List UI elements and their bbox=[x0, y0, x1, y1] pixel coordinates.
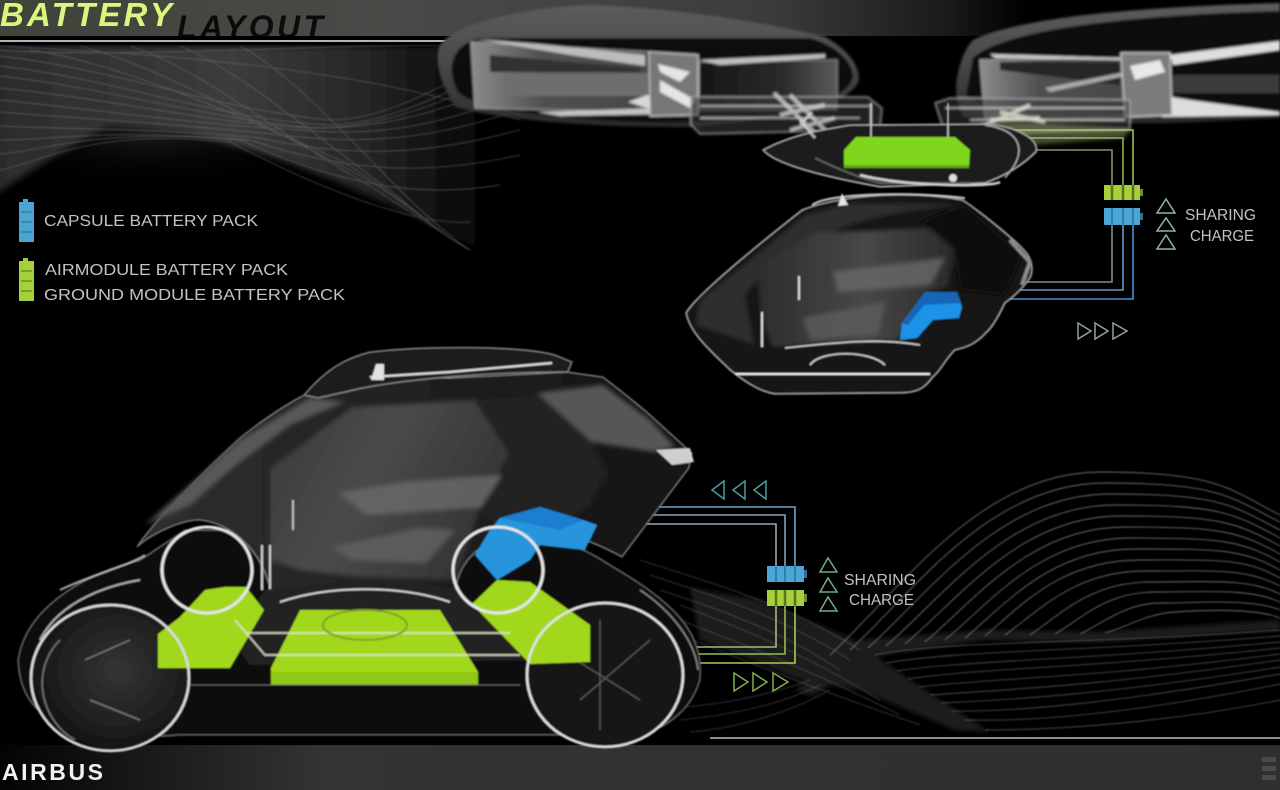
capsule upper-left panel bbox=[695, 203, 960, 345]
air module green battery bbox=[844, 137, 970, 168]
connector lines: car blue bbox=[600, 507, 795, 566]
rotor blades bbox=[475, 39, 825, 116]
ribbon haze bbox=[690, 588, 1280, 732]
capsule shell bbox=[686, 195, 1032, 394]
connector lines: capsule blue bbox=[955, 225, 1133, 299]
rotor hub bbox=[649, 52, 698, 116]
front wheel arch ring bbox=[453, 527, 543, 613]
icon: blue battery bbox=[19, 199, 34, 242]
capsule window bbox=[757, 228, 955, 347]
rotor duct outer bbox=[956, 3, 1280, 123]
car cabin shell bbox=[137, 372, 692, 590]
rotor hub bbox=[1121, 53, 1172, 117]
upper green battery bbox=[1104, 185, 1143, 200]
rear wheel bbox=[30, 604, 190, 752]
logo: airbus: AIRBUS bbox=[2, 759, 103, 785]
legend bbox=[19, 199, 345, 304]
car front light bbox=[656, 448, 694, 465]
crest lines bbox=[830, 472, 1280, 655]
lower lines bbox=[875, 630, 1280, 730]
battery indicator: lower sharing charge bbox=[767, 566, 807, 606]
connector lines: air module green bbox=[970, 130, 1133, 185]
icon: green battery bbox=[19, 258, 34, 301]
title: LAYOUT bbox=[177, 9, 325, 45]
rotor inner box right bbox=[699, 60, 837, 110]
rotor left bbox=[437, 5, 882, 137]
battery indicator: upper sharing charge bbox=[1104, 185, 1143, 225]
label: sharing charge: CHARGE bbox=[1190, 228, 1254, 245]
capsule interior panels bbox=[695, 203, 1022, 347]
legend: capsule battery pack bbox=[19, 199, 258, 242]
car roof canopy bbox=[304, 347, 572, 398]
capsule seat base bbox=[785, 341, 920, 365]
label: sharing charge: CHARGE bbox=[849, 592, 914, 609]
header band bbox=[0, 0, 1280, 45]
green battery: rear bbox=[158, 587, 264, 668]
rotor blades bbox=[990, 41, 1280, 117]
capsule blue battery bbox=[900, 292, 962, 340]
label: sharing charge: SHARING bbox=[844, 572, 916, 589]
upward triangles bbox=[1157, 199, 1175, 249]
rear wheel arch ring bbox=[162, 527, 252, 613]
label: sharing charge bbox=[1185, 207, 1256, 245]
car front pane bbox=[537, 385, 675, 452]
upper blue battery bbox=[1104, 208, 1143, 225]
rotor lower cup bbox=[691, 97, 882, 134]
label: sharing charge bbox=[844, 572, 916, 609]
legend: airmodule and ground module battery pack bbox=[19, 258, 345, 304]
blue battery bbox=[475, 507, 597, 580]
rotor lower cup bbox=[935, 98, 1130, 134]
footer rule bbox=[710, 737, 1280, 739]
arrows: direction right lower bbox=[734, 673, 788, 691]
lower blue battery bbox=[767, 566, 807, 582]
wave pattern: bottom right bbox=[640, 472, 1280, 732]
legend: capsule battery pack: CAPSULE BATTERY PACK bbox=[44, 213, 258, 230]
rotor right bbox=[935, 3, 1280, 134]
left lines bbox=[640, 560, 920, 732]
green battery: centre bbox=[271, 610, 478, 685]
rotor duct outer bbox=[437, 5, 859, 127]
wave pattern: top left bbox=[0, 45, 530, 250]
car floor bbox=[232, 582, 530, 665]
car window bbox=[269, 400, 509, 580]
legend: airmodule and ground module battery pack: GROUND MODULE BATTERY PACK bbox=[44, 287, 345, 304]
rotor inner box left bbox=[471, 42, 650, 112]
connector lines: car green bbox=[620, 606, 795, 663]
capsule top edge highlight bbox=[812, 194, 965, 205]
label: sharing charge: SHARING bbox=[1185, 207, 1256, 224]
rotor inner box bbox=[980, 58, 1125, 120]
rear wheel ring bbox=[31, 605, 189, 751]
capsule bbox=[686, 193, 1032, 394]
green battery: front bbox=[472, 580, 590, 664]
lower triangles and label bbox=[820, 558, 916, 611]
car floor pan outline bbox=[235, 620, 520, 655]
lower green battery bbox=[767, 590, 807, 606]
car seats bbox=[339, 475, 502, 515]
car cabin interior panels bbox=[145, 385, 675, 580]
air module bbox=[763, 103, 1037, 187]
arrows: direction left lower bbox=[712, 481, 766, 499]
capsule dark pane bbox=[920, 205, 1022, 295]
footer band bbox=[0, 745, 1280, 790]
car lower body outline bbox=[18, 530, 700, 737]
front wheel bbox=[527, 603, 683, 747]
upward triangles bbox=[820, 558, 837, 611]
watermark mark: bottom right bbox=[1262, 757, 1276, 780]
front wheel ring bbox=[527, 603, 683, 747]
legend: airmodule and ground module battery pack: AIRMODULE BATTERY PACK bbox=[45, 262, 288, 279]
upper triangles and label bbox=[1157, 199, 1256, 249]
air module pins bbox=[871, 103, 948, 137]
car dark inner pane bbox=[474, 395, 607, 528]
air module shell bbox=[763, 124, 1037, 187]
title bbox=[0, 0, 330, 45]
green glow on connector bbox=[970, 122, 1130, 145]
car a-pillar panel bbox=[145, 398, 345, 525]
car bbox=[18, 347, 700, 752]
arrows: direction right upper bbox=[1078, 323, 1127, 339]
